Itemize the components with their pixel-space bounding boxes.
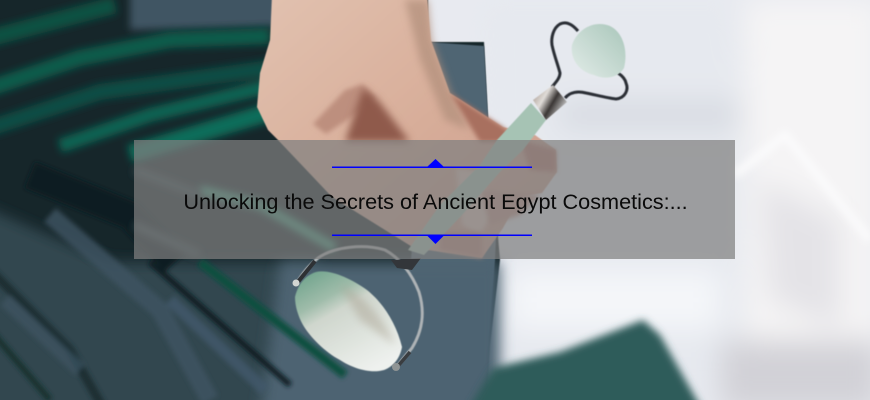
teal object bottom right (462, 320, 708, 400)
title panel (134, 140, 735, 259)
hand (257, 0, 557, 258)
back-of-hand shading (405, 0, 470, 130)
roller top frame (552, 23, 627, 99)
roller top stone (572, 24, 625, 78)
roller bottom stone (295, 271, 402, 371)
grey-blue cloth, upper (130, 0, 280, 30)
roller collar, lower (391, 258, 421, 270)
dark cloth and palm leaf (0, 0, 500, 400)
roller bottom frame (297, 247, 422, 365)
leaf highlight behind panel (200, 190, 335, 248)
grey-blue pleats lower left (0, 205, 320, 400)
thumb shadow (313, 84, 376, 134)
bottom ornament (332, 234, 532, 244)
panel background (134, 140, 735, 259)
roller collar (533, 85, 567, 120)
grey-blue cloth, right side (400, 42, 500, 400)
roller handle (408, 103, 546, 255)
heading: Unlocking the Secrets of Ancient Egypt Cosmetics:... (183, 189, 688, 214)
top ornament (332, 159, 532, 168)
fingers and nails behind panel (456, 168, 492, 235)
green leaf stripes (0, 5, 270, 154)
